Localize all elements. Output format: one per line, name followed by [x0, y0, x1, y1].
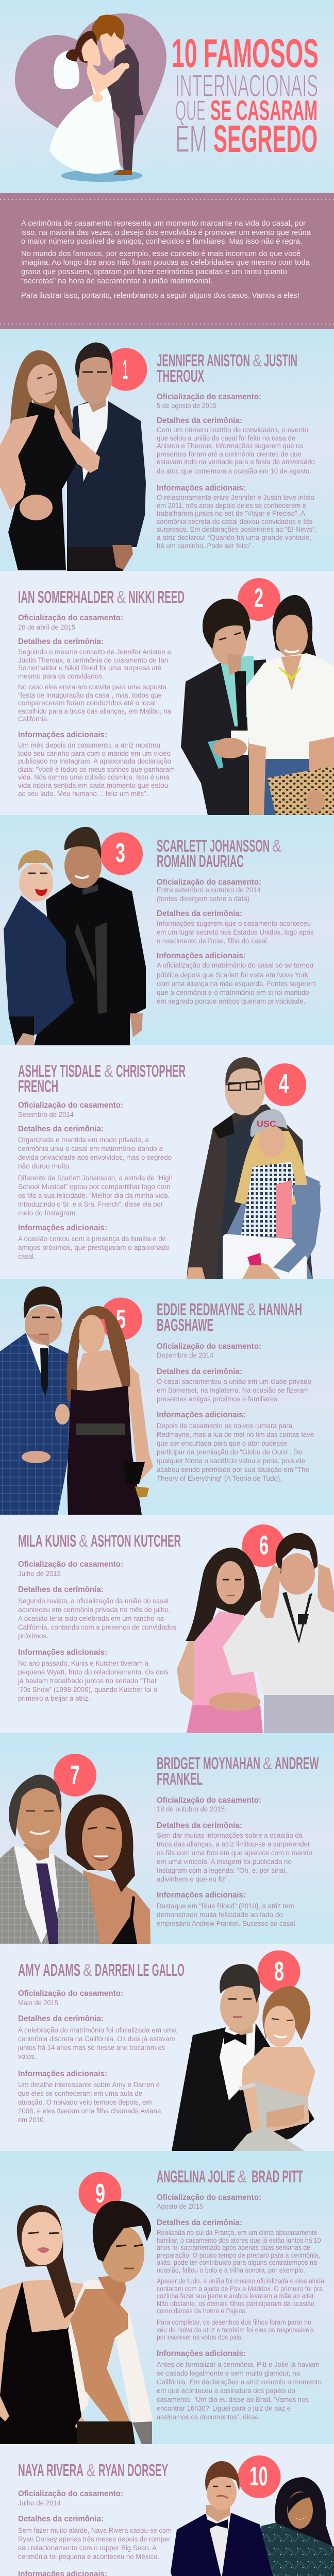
wedding date: Oficialização do casamento: — [157, 393, 261, 401]
heading: IAN SOMERHALDER — [18, 587, 114, 606]
intro text: grana que possuem, optaram por fazer cerimônias pacatas e um tanto quanto — [21, 267, 287, 276]
ceremony details: escolhido para a troca das alianças, em Malibu, na — [18, 707, 171, 715]
ceremony details: familiar, o casamento dos atores que já estão juntos há 10 — [157, 2236, 321, 2244]
ceremony details: Realizada no sul da França, em um clima absolutamente — [157, 2229, 318, 2236]
wedding date: Oficialização do casamento: — [18, 1560, 123, 1569]
ceremony details: Justin Theroux, a cerimônia de casamento de Ian — [18, 656, 168, 664]
ceremony details: No caso eles enviaram convite para uma suposta — [18, 683, 166, 691]
additional info: No ano passado, Kunis e Kutcher tiveram a — [18, 1659, 148, 1667]
additional info: casal. — [18, 1252, 35, 1260]
wedding date: Julho de 2014 — [18, 2499, 61, 2507]
photo: Angelina Jolie and Brad Pitt — [0, 2201, 153, 2444]
additional info: primeiro a beijar a atriz. — [18, 1694, 90, 1702]
additional info: Um mês depois do casamento, a atriz mostrou — [18, 741, 160, 749]
ceremony details — [157, 1367, 311, 1403]
ceremony details — [18, 637, 171, 723]
photo: Ashley Tisdale and Christopher French: USC — [257, 1119, 276, 1129]
number badge 6 — [242, 1524, 285, 1567]
heading: THEROUX — [157, 366, 204, 385]
additional info: que eles se conheceram em uma aula de — [18, 2090, 142, 2097]
additional info: pública depois que Scarlett foi vista em Nova York — [157, 971, 308, 979]
additional info: Informações adicionais: — [18, 2070, 107, 2078]
heading: MILA KUNIS — [18, 1531, 76, 1550]
ceremony details: em Somerset, na Inglaterra. Na ocasião se fizeram — [157, 1386, 309, 1394]
icon: heart — [15, 13, 166, 170]
ceremony details — [18, 1125, 173, 1217]
heading: EDDIE REDMAYNE — [157, 1300, 244, 1319]
ceremony details: Sem fazer muito alarde, Naya Rivera casou-se com — [18, 2527, 172, 2534]
panel: hero — [0, 0, 334, 193]
ceremony details: Detalhes da cerimônia: — [18, 2014, 104, 2023]
heading: NAYA RIVERA — [18, 2461, 84, 2480]
number badge 10 — [238, 2455, 280, 2498]
panel: couple 3 — [0, 815, 334, 1045]
ceremony details: Califórnia. — [18, 715, 49, 723]
additional info: Informações adicionais: — [157, 2349, 246, 2358]
panel: couple 4 — [0, 1045, 334, 1279]
additional info: vida inteira sentida em cada momento que estou — [18, 782, 168, 789]
wedding date: 18 de outubro de 2015 — [157, 1805, 225, 1813]
additional info: Um detalhe interessante sobre Amy e Darren é — [18, 2081, 160, 2089]
additional info: Depois do casamento os noivos rumara para — [157, 1422, 292, 1430]
heading: & — [247, 1300, 256, 1319]
additional info: A oficialização do matrimônio do casal só se tornou — [157, 961, 313, 969]
heading: & — [87, 2461, 96, 2480]
heading: FRENCH — [18, 1077, 58, 1096]
panel: couple 1 — [0, 329, 334, 571]
wedding date: Julho de 2015 — [18, 1570, 61, 1578]
photo: Mila Kunis and Ashton Kutcher — [177, 1533, 334, 1733]
ceremony details: em um lugar secreto nos Estados Unidos, logo após — [157, 928, 314, 936]
ceremony details: Diferente de Scarlett Johansson, a estrela de “High — [18, 1174, 173, 1182]
heading: & — [238, 2167, 246, 2186]
ceremony details: cozinha fazer sua parte e ambos levaram a mãe ao altar. — [157, 2292, 315, 2300]
wedding date: Oficialização do casamento: — [18, 2489, 123, 2498]
ceremony details: Para completar, os desenhos dos filhos foram parar no — [157, 2318, 311, 2326]
wedding date: Oficialização do casamento: — [18, 614, 123, 622]
additional info: a atriz declarou: “Quando há uma grande vontade, — [157, 534, 311, 541]
additional info: já haviam trabalhado juntos no seriado “That — [18, 1677, 157, 1685]
ceremony details: preparação. O pouco tempo de preparo para a cerimônia, — [157, 2251, 320, 2259]
heading: RYAN DORSEY — [98, 2461, 168, 2480]
panel: couple 9 — [0, 2151, 334, 2444]
wedding date: Oficialização do casamento: — [157, 2193, 261, 2202]
photo: Scarlett Johansson and Romain Dauriac — [4, 827, 146, 1045]
ceremony details: mesmo para os convidados. — [18, 672, 104, 680]
ceremony details: Detalhes da cerimônia: — [157, 1821, 242, 1830]
ceremony details: devida privacidade aos envolvidos, mas o segredo — [18, 1154, 172, 1161]
number badge 5: 5 — [116, 1304, 126, 1334]
additional info: Califórnia. Em declarações a atriz resumiu o momento — [157, 2378, 322, 2386]
wedding date — [18, 1101, 123, 1118]
ceremony details: cerimônia foi pequena e aconteceu no México. — [18, 2553, 159, 2561]
wedding date: 5 de agosto de 2015 — [157, 402, 216, 410]
additional info: Informações adicionais: — [157, 1891, 246, 1900]
ceremony details: presentes foram até a cerimônia crentes de que — [157, 450, 302, 458]
wedding date: (fontes divergem sobre a data) — [157, 895, 249, 903]
additional info: 2008, e eles tiveram uma filha chamada Aviana, — [18, 2107, 163, 2115]
intro text: Para ilustrar isso, portanto, relembramos a seguir alguns dos casos. Vamos a eles! — [21, 291, 299, 300]
ceremony details — [18, 1585, 176, 1640]
additional info: A ocasião contou com a presença da família e de — [18, 1235, 166, 1243]
heading — [18, 1061, 186, 1096]
additional info: empresário Andrew Frankel. Sucesso ao casal. — [157, 1920, 297, 1927]
intro text: No mundo dos famosos, por exemplo, esse conceito é mais incomum do que você — [21, 249, 300, 258]
ceremony details: adivinhem o que eu fiz”. — [157, 1875, 229, 1883]
heading — [18, 1531, 181, 1550]
panel: couple 5 — [0, 1279, 334, 1515]
number badge 1 — [104, 348, 147, 391]
wedding date: 26 de abril de 2015 — [18, 623, 75, 631]
ceremony details: Califórnia, contando com a presença de convidados — [18, 1623, 176, 1631]
ceremony details: Instagram com a legenda: “Oh, e, por sinal, — [157, 1867, 287, 1874]
additional info: encontrar 16h30?’ Liguei para o juiz de paz e — [157, 2404, 291, 2412]
ceremony details: como damas de honra e Pajens. — [157, 2307, 247, 2315]
ceremony details: Detalhes da cerimônia: — [157, 2218, 242, 2227]
bride — [49, 31, 129, 174]
ceremony details: Aniston e Theroux. Informações sugerem que os — [157, 442, 303, 450]
ceremony details: do ator, que comemora a ocasião em 10 de agosto. — [157, 467, 311, 475]
panel: couple 7 — [0, 1733, 334, 1944]
ceremony details: Não obstante, os demais filhos participaram da ocasião — [157, 2300, 314, 2308]
panel: couple 10 — [0, 2444, 334, 2576]
photo: Ashley Tisdale and Christopher French — [187, 1057, 321, 1279]
shadow — [61, 170, 142, 182]
ceremony details: anos foi sacramentado após apenas duas semanas de — [157, 2244, 310, 2251]
number badge 6: 6 — [259, 1531, 269, 1561]
wedding date — [157, 878, 261, 903]
ceremony details: Detalhes da cerimônia: — [18, 637, 104, 646]
number badge 9 — [78, 2172, 122, 2214]
additional info: Antes de formalizar a cerimônia, Pitt e Jolie já haviam — [157, 2361, 320, 2368]
ceremony details: seu relacionamento com o rapper Big Sean. A — [18, 2544, 157, 2552]
panel: couple 6 — [0, 1515, 334, 1733]
additional info: Destaque em “Blue Blood” (2010), a atriz tem — [157, 1902, 294, 1910]
heading: ANGELINA JOLIE — [157, 2167, 235, 2186]
illustration: bride and groom in front of heart — [15, 13, 166, 182]
heading: BRIDGET MOYNAHAN — [157, 1754, 260, 1773]
heading: & — [253, 351, 262, 370]
additional info: casamento. “Um dia eu disse ao Brad, ‘Vamos nos — [157, 2396, 309, 2403]
ceremony details — [18, 2515, 172, 2561]
additional info: ao seu lado. Meu humano… feliz um mês”. — [18, 790, 148, 798]
ceremony details: por escrever os votos dos pais. — [157, 2333, 243, 2341]
wedding date — [157, 1796, 261, 1813]
title: EM — [175, 117, 207, 160]
number badge 7: 7 — [70, 1760, 80, 1790]
ceremony details: Ryan Dorsey apenas três meses depois de romper — [18, 2535, 171, 2543]
ceremony details: véu de noiva da atriz e também foi eles os responsáveis — [157, 2326, 314, 2334]
wedding date: Dezembro de 2014 — [157, 1351, 213, 1359]
wedding date — [18, 1989, 123, 2007]
ceremony details: Detalhes da cerimônia: — [18, 1125, 104, 1133]
ceremony details: em uma vinícola. A imagem foi publicada no — [157, 1858, 292, 1866]
additional info: há um caminho. Pode ser feito”. — [157, 542, 253, 550]
ceremony details: o nascimento de Rose, filha do casal. — [157, 937, 269, 945]
ceremony details: A celebração do matrimônio foi oficializada em uma — [18, 2026, 177, 2034]
additional info: Informações adicionais: — [18, 1224, 107, 1232]
photo: Eddie Redmayne and Hannah Bagshawe — [0, 1286, 153, 1515]
wedding date — [18, 2489, 123, 2507]
title — [172, 30, 319, 160]
heading: FRANKEL — [157, 1769, 203, 1788]
intro text: o maior número possível de amigos, conhecidos e familiares. Mas isso não é regra. — [21, 237, 302, 246]
veil — [54, 50, 79, 89]
additional info: Informações adicionais: — [157, 1411, 246, 1419]
ceremony details: presentes amigos próximos e familiares. — [157, 1395, 279, 1403]
ceremony details: Introduzindo o Sr. e a Sra. French”, disse ela por — [18, 1200, 163, 1208]
ceremony details: cerimônia discreta na Califórnia. Os dois já estavam — [18, 2035, 175, 2043]
wedding date: Agosto de 2015 — [157, 2202, 203, 2210]
ceremony details: juntos há 14 anos mas só nesse ano trocaram os — [18, 2044, 165, 2052]
heading: ROMAIN DAURIAC — [157, 852, 244, 871]
intro text — [21, 219, 311, 300]
ceremony details: cerimônia uniu o casal em matrimônio dando a — [18, 1145, 163, 1153]
intro text: isso, na maioria das vezes, o desejo dos envolvidos é promover um evento que reúna — [21, 228, 311, 237]
ceremony details: Com um número restrito de convidados, o evento — [157, 426, 308, 434]
number badge 1: 1 — [123, 355, 128, 385]
heading: & — [83, 1960, 92, 1979]
photo: Naya Rivera and Ryan Dorsey — [171, 2461, 334, 2576]
ceremony details: A ocasião teria sido celebrada em um rancho na — [18, 1615, 164, 1622]
additional info: publicado no Instagram. A apaixonada declaração — [18, 757, 171, 765]
additional info: Informações adicionais: — [157, 952, 246, 960]
ceremony details — [18, 2014, 177, 2060]
additional info: em 2010. — [18, 2116, 45, 2124]
heading — [157, 351, 297, 385]
wedding date: Oficialização do casamento: — [18, 1989, 123, 1998]
heading — [157, 1754, 319, 1788]
ceremony details: O casal sacramentou a união em um clube privado — [157, 1378, 311, 1385]
additional info: demonstrado muita felicidade ao lado do — [157, 1911, 283, 1919]
ceremony details: aconteceu em cerimônia privada no mês de julho. — [18, 1606, 170, 1614]
additional info: Theory of Everything” (A Teoria de Tudo). — [157, 1475, 282, 1482]
number badge 3 — [100, 833, 143, 875]
number badge 2 — [238, 578, 280, 621]
additional info — [157, 1411, 314, 1482]
photo: Jennifer Aniston and Justin Theroux — [0, 343, 146, 571]
additional info: cerimônia secreta do casal deixou convidados e fãs — [157, 518, 312, 526]
additional info: pequena Wyatt, fruto do relacionamento. Os dois — [18, 1668, 169, 1676]
ceremony details: Detalhes da cerimônia: — [157, 909, 242, 918]
heading: & — [272, 836, 281, 855]
heading: ASHLEY TISDALE — [18, 1061, 101, 1080]
panel: couple 8 — [0, 1944, 334, 2151]
ceremony details: compareceram foram conduzidos até o local — [18, 699, 156, 707]
intro text: “secretas” na hora de sacramentar a união matrimonial. — [21, 277, 212, 285]
number badge 10: 10 — [249, 2462, 268, 2492]
additional info: atuação. O noivado veio tempos depois, em — [18, 2098, 152, 2106]
number badge 4 — [263, 1063, 306, 1106]
number badge 2: 2 — [254, 583, 263, 613]
additional info — [18, 2070, 163, 2124]
additional info: O relacionamento entre Jennifer e Justin teve início — [157, 494, 314, 501]
wedding date — [157, 2193, 261, 2210]
number badge 8 — [258, 1951, 300, 1993]
ceremony details — [157, 1821, 312, 1883]
wedding date: Oficialização do casamento: — [157, 1342, 261, 1351]
panel: couple 2 — [0, 571, 334, 815]
additional info: participar da premiação do “Globo de Ouro”. De — [157, 1448, 302, 1456]
heading: BAGSHAWE — [157, 1315, 213, 1334]
additional info: em segredo porque ambos queriam privacidade. — [157, 997, 305, 1005]
ceremony details: Detalhes da cerimônia: — [157, 416, 242, 425]
additional info: amigos próximos, que prestigiaram o apaixonado — [18, 1244, 170, 1251]
additional info: Informações adicionais: — [18, 1648, 107, 1657]
heading — [157, 1300, 302, 1334]
heading: & — [104, 1061, 113, 1080]
heading — [18, 1960, 185, 1979]
ceremony details: não durou muito. — [18, 1162, 71, 1170]
additional info: dizia: “Você é todos os meus sonhos que ganharam — [18, 766, 175, 773]
panel: introduction — [0, 193, 334, 329]
heading: NIKKI REED — [128, 587, 185, 606]
additional info: com uma aliança na mão esquerda. Fontes sugerem — [157, 980, 316, 988]
ceremony details: School Musical” optou por compartilhar logo com — [18, 1183, 170, 1191]
additional info: qualquer forma o sacrifício valeu a pena, pois ele — [157, 1457, 305, 1465]
wedding date — [18, 614, 123, 631]
ceremony details: aliás, pode ter contribuído para alguns contratempos na — [157, 2259, 317, 2266]
ceremony details: contaram com a ajuda de Pax e Maddox. O primeiro foi pra — [157, 2285, 323, 2293]
wedding date: Oficialização do casamento: — [157, 878, 261, 887]
ceremony details: troca das alianças, a atriz limitou-se a surpreender — [157, 1840, 310, 1848]
ceremony details: Seguindo o mesmo conceito de Jennifer Aniston e — [18, 648, 171, 656]
additional info: em 2011, três anos depois deles se conhecerem e — [157, 502, 306, 510]
groom — [92, 15, 143, 175]
additional info — [18, 1224, 170, 1260]
wedding date: Oficialização do casamento: — [157, 1796, 261, 1805]
additional info — [18, 731, 175, 798]
additional info — [157, 484, 316, 550]
number badge 7 — [54, 1754, 96, 1797]
ceremony details: próximos. — [18, 1632, 48, 1640]
number badge 9: 9 — [95, 2179, 105, 2209]
additional info — [18, 1648, 169, 1702]
heading: ASHTON KUTCHER — [91, 1531, 181, 1550]
ceremony details: Somerhalder e Nikki Reed foi uma surpresa até — [18, 664, 161, 672]
wedding date: Setembro de 2014 — [18, 1111, 74, 1118]
heading: & — [79, 1531, 88, 1550]
additional info: que ser encurtada para que o ator pudesse — [157, 1439, 287, 1447]
ceremony details — [157, 909, 314, 945]
title: QUE — [175, 94, 206, 126]
ceremony details: estavam indo na verdade para a festa de aniversário — [157, 458, 315, 466]
additional info: Redmayne, mas a lua de mel no fim das contas teve — [157, 1431, 314, 1438]
wedding date: Maio de 2015 — [18, 1999, 58, 2007]
additional info: vida. Nós somos uma colisão cósmica. Isso é uma — [18, 773, 169, 781]
ceremony details: que selou a união do casal foi feito na casa de — [157, 434, 295, 442]
wedding date: Entre setembro e outubro de 2014 — [157, 886, 261, 894]
heading: DARREN LE GALLO — [95, 1960, 185, 1979]
photo: Ian Somerhalder and Nikki Reed — [181, 595, 334, 815]
additional info: em que aconteceu a assinatura dos papéis do — [157, 2387, 295, 2395]
ceremony details — [157, 416, 315, 475]
wedding date — [157, 393, 261, 410]
additional info: ‘70s Show” (1998-2006), quando Kutcher foi o — [18, 1686, 157, 1693]
number badge 8: 8 — [274, 1957, 284, 1987]
heading: HANNAH — [259, 1300, 302, 1319]
wedding date — [18, 1560, 123, 1578]
number badge 3: 3 — [115, 838, 125, 868]
intro text: A cerimônia de casamento representa um momento marcante na vida do casal, por — [21, 219, 306, 228]
additional info — [157, 1891, 297, 1927]
additional info: trabalharem juntos no set de “Viajar é Preciso”. A — [157, 510, 305, 517]
additional info: Informações adicionais: — [157, 484, 246, 493]
number badge 5 — [99, 1297, 142, 1341]
heading: & — [116, 587, 126, 606]
additional info: surpresos. Em declarações posteriores ao “E! News”, — [157, 526, 316, 533]
ceremony details: “festa de inauguração da casa”, mas, todos que — [18, 691, 162, 699]
additional info: todo seu carinho para com o marido em um vídeo — [18, 750, 171, 757]
heading: & — [263, 1754, 272, 1773]
additional info — [157, 2349, 322, 2421]
ceremony details: Segundo revista, a oficialização da união do casal — [18, 1597, 169, 1605]
additional info: Informações adicionais: — [18, 731, 107, 739]
wedding date: Oficialização do casamento: — [18, 1101, 123, 1110]
ceremony details: ocasião, faltou o bolo e a trilha sonora, por exemplo. — [157, 2266, 305, 2274]
heading — [157, 836, 281, 871]
intro text: imagina. Ao longo dos anos não foram poucas as celebridades que mesmo com toda — [21, 258, 310, 267]
number badge 4: 4 — [278, 1069, 289, 1099]
ceremony details: meio do Instagram. — [18, 1209, 77, 1217]
ceremony details — [157, 2218, 324, 2341]
photo: Bridget Moynahan and Andrew Frankel — [0, 1774, 151, 1944]
heading: AMY ADAMS — [18, 1960, 80, 1979]
photo: Amy Adams and Darren Le Gallo — [172, 1964, 315, 2151]
ceremony details: Detalhes da cerimônia: — [18, 2515, 104, 2523]
ceremony details: Detalhes da cerimônia: — [18, 1585, 104, 1594]
ceremony details: votos. — [18, 2053, 36, 2060]
ceremony details: Detalhes da cerimônia: — [157, 1367, 242, 1376]
wedding date — [157, 1342, 261, 1359]
heading: JUSTIN — [264, 351, 297, 370]
additional info: assinamos os documentos”, disse. — [157, 2413, 261, 2421]
ceremony details: Informações sugerem que o casamento aconteceu — [157, 920, 311, 927]
heading: JENNIFER ANISTON — [157, 351, 250, 370]
ceremony details: Organizada e mantida em modo privado, a — [18, 1136, 149, 1144]
ceremony details: Sem dar muitas informações sobre a ocasião da — [157, 1832, 303, 1839]
ceremony details: os fãs a sua felicidade. “Melhor dia da minha vida. — [18, 1192, 170, 1199]
additional info: se casado legalmente e sem muito glamour, na — [157, 2369, 300, 2377]
additional info: que a cerimônia e o matrimônio em si foi mantido — [157, 989, 309, 996]
heading: CHRISTOPHER — [116, 1061, 186, 1080]
additional info — [157, 952, 316, 1005]
additional info: acabou sendo premiado por sua atuação em “The — [157, 1466, 309, 1473]
ceremony details: os fãs com uma foto em que aparece com o marido — [157, 1849, 312, 1857]
